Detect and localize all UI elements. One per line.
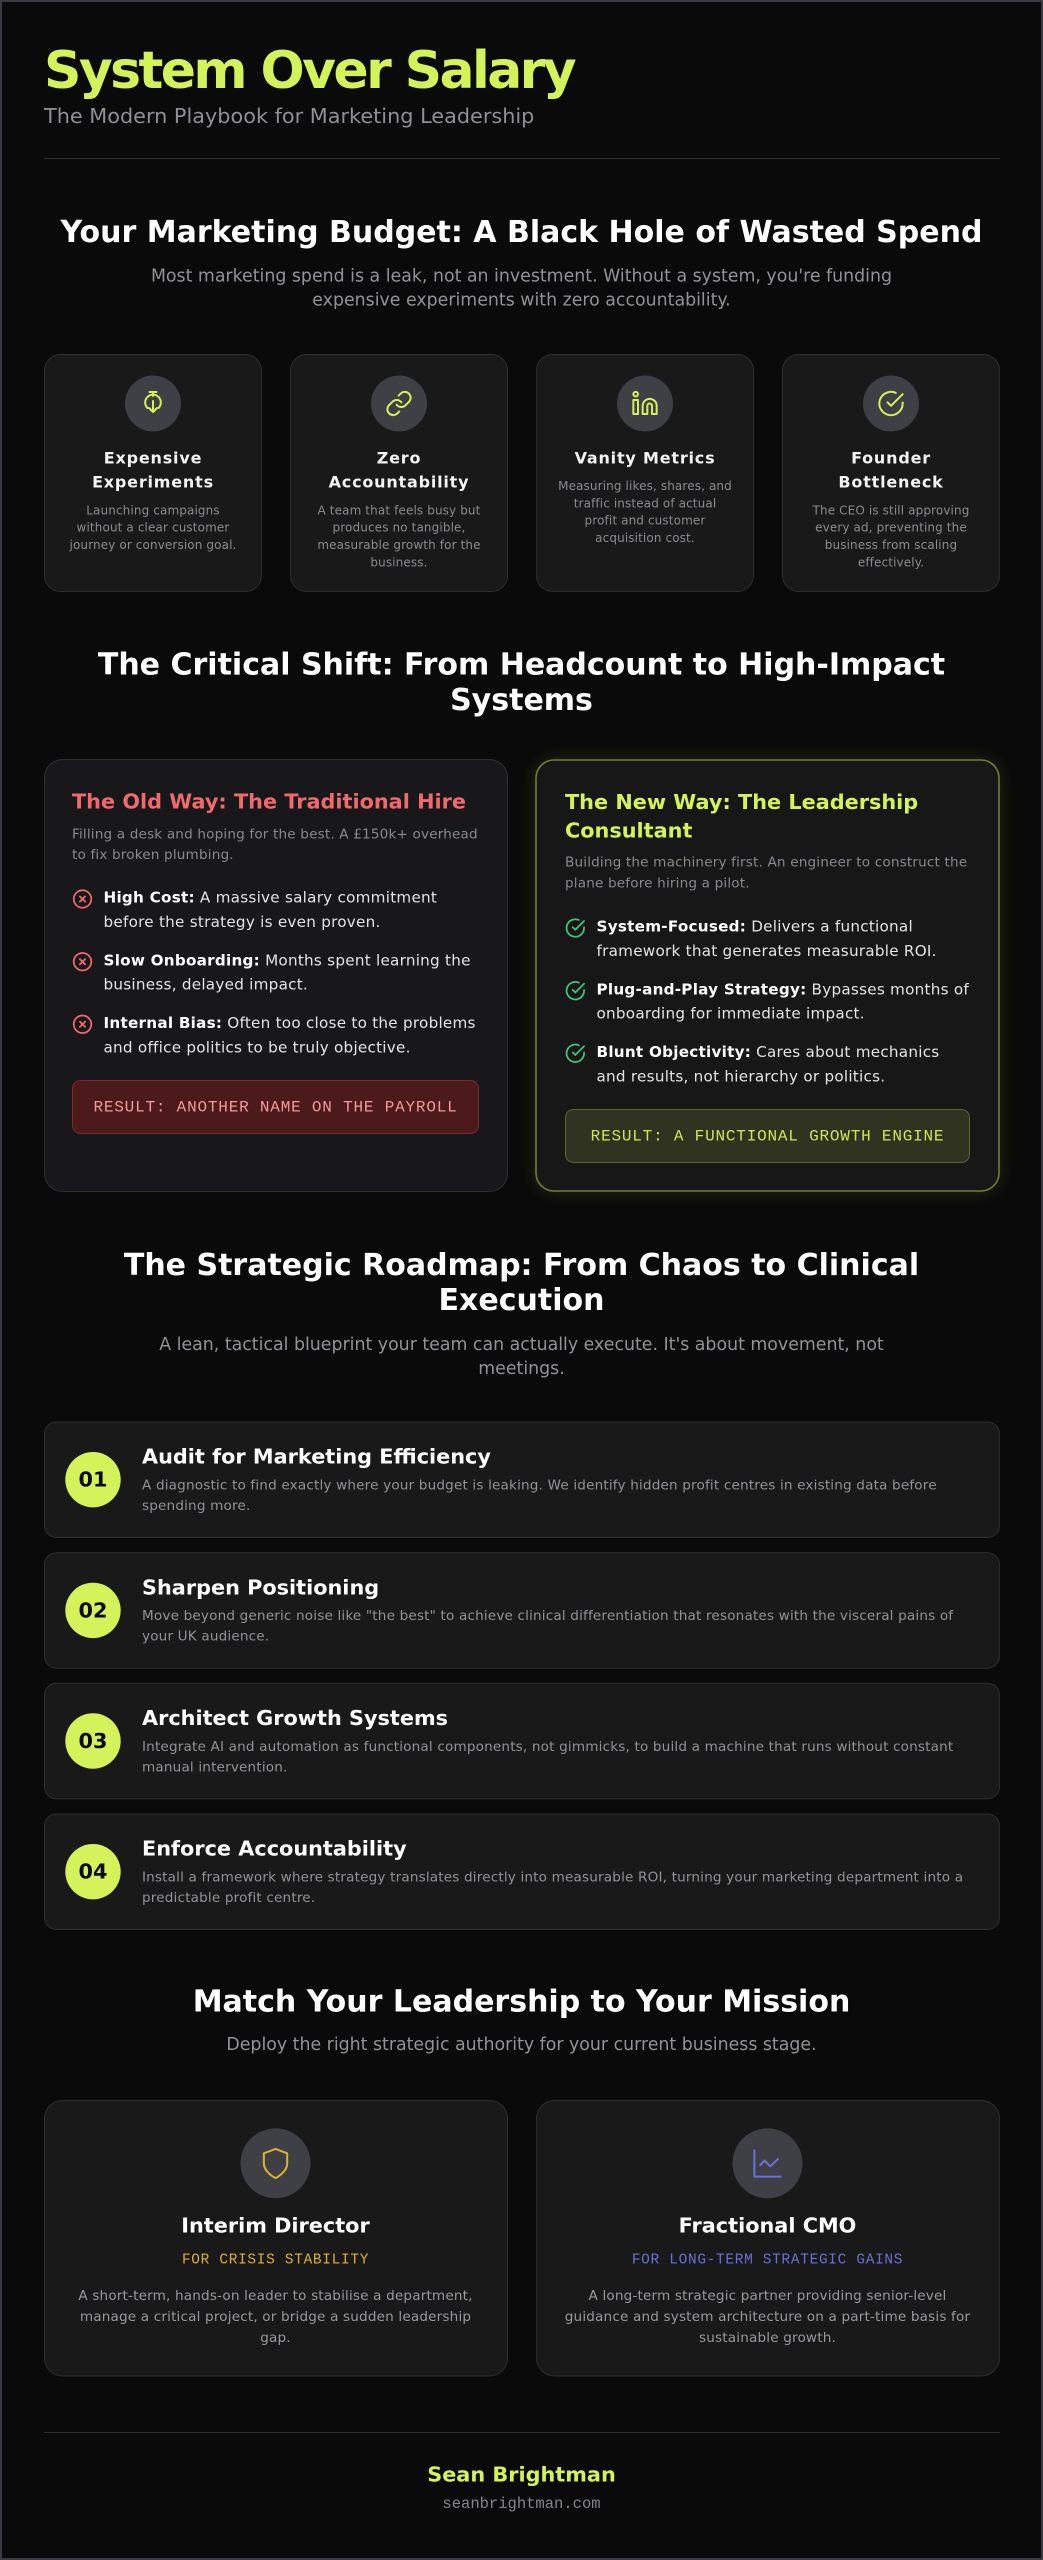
panel: vanity metrics: Vanity Metrics bbox=[575, 448, 715, 468]
panel: step 02 bbox=[44, 1553, 1000, 1668]
panel: expensive experiments: Experiments bbox=[92, 472, 214, 492]
subtitle: The Modern Playbook for Marketing Leadership bbox=[43, 104, 534, 128]
icon: link bbox=[387, 392, 411, 415]
panel: the old way bbox=[44, 760, 508, 1192]
panel: vanity metrics: acquisition cost. bbox=[595, 531, 695, 545]
section heading: wasted spend: Most marketing spend is a leak, not an investment. Without a system, you're funding bbox=[151, 266, 892, 286]
panel: the new way: and results, not hierarchy or politics. bbox=[596, 1067, 885, 1085]
section heading: match leadership: Deploy the right strategic authority for your current business stage. bbox=[226, 2035, 817, 2055]
icon: circle check bbox=[879, 392, 903, 415]
panel: interim director: gap. bbox=[260, 2330, 291, 2346]
panel: interim director bbox=[44, 2100, 508, 2376]
panel: expensive experiments: without a clear customer bbox=[77, 521, 229, 535]
section heading: critical shift: Systems bbox=[450, 683, 593, 718]
header: title and subtitle bbox=[43, 41, 576, 128]
panel: interim director: Interim Director bbox=[181, 2214, 370, 2238]
section heading: roadmap: meetings. bbox=[478, 1359, 565, 1379]
panel: interim director: manage a critical project, or bridge a sudden leadership bbox=[80, 2309, 471, 2325]
panel: founder bottleneck: Founder bbox=[851, 448, 931, 468]
panel: expensive experiments: Expensive bbox=[104, 448, 202, 468]
panel: vanity metrics bbox=[536, 354, 754, 592]
panel: vanity metrics: Measuring likes, shares, and bbox=[558, 479, 732, 493]
panel: the old way: Internal Bias: Often too close to the problems bbox=[104, 1014, 476, 1032]
panel: the new way: framework that generates measurable ROI. bbox=[596, 942, 937, 960]
panel: step 04: Enforce Accountability bbox=[142, 1837, 407, 1861]
icon: funnel arrow bbox=[145, 392, 161, 412]
panel: step 04 bbox=[44, 1814, 1000, 1930]
section heading: roadmap bbox=[124, 1248, 919, 1379]
panel: step 03: Integrate AI and automation as functional components, not gimmicks, to build a machine that runs without constant bbox=[142, 1739, 953, 1755]
panel: the new way: onboarding for immediate impact. bbox=[596, 1005, 865, 1023]
panel: the new way: System-Focused: Delivers a functional bbox=[596, 918, 913, 936]
panel: fractional cmo: FOR LONG-TERM STRATEGIC GAINS bbox=[632, 2253, 903, 2269]
panel: zero accountability: Zero bbox=[377, 448, 421, 468]
panel: the old way: Slow Onboarding: Months spent learning the bbox=[104, 951, 471, 969]
panel: the old way: Filling a desk and hoping for the best. A £150k+ overhead bbox=[72, 826, 478, 842]
section heading: critical shift bbox=[98, 648, 945, 718]
icon: line chart bbox=[754, 2150, 781, 2177]
footer: Sean Brightman bbox=[427, 2462, 616, 2486]
panel: founder bottleneck: The CEO is still approving bbox=[812, 504, 969, 518]
panel: step 02: Sharpen Positioning bbox=[142, 1575, 379, 1599]
callout: old way result: RESULT: ANOTHER NAME ON THE PAYROLL bbox=[93, 1099, 458, 1117]
panel: zero accountability: Accountability bbox=[329, 472, 469, 492]
panel: step 03: 03 bbox=[79, 1729, 107, 1753]
footer: seanbrightman.com bbox=[442, 2495, 601, 2513]
panel: expensive experiments: Launching campaigns bbox=[86, 504, 220, 518]
icon: check circle bbox=[567, 919, 584, 937]
callout: old way result bbox=[72, 1080, 478, 1134]
panel: step 01: Audit for Marketing Efficiency bbox=[142, 1445, 491, 1469]
section heading: roadmap: The Strategic Roadmap: From Chaos to Clinical bbox=[124, 1248, 919, 1283]
panel: the old way: business, delayed impact. bbox=[104, 976, 308, 994]
panel: step 04: 04 bbox=[79, 1860, 107, 1884]
panel: interim director: FOR CRISIS STABILITY bbox=[182, 2253, 369, 2269]
panel: zero accountability: measurable growth for the bbox=[317, 538, 481, 552]
panel: the new way bbox=[536, 760, 999, 1191]
panel: step 02: 02 bbox=[79, 1598, 107, 1622]
panel: step 03: manual intervention. bbox=[142, 1759, 288, 1775]
panel: step 01: spending more. bbox=[142, 1498, 250, 1514]
panel: step 04: predictable profit centre. bbox=[142, 1890, 315, 1906]
section heading: wasted spend bbox=[60, 215, 982, 310]
section heading: critical shift: The Critical Shift: From Headcount to High-Impact bbox=[98, 648, 945, 682]
panel: the old way: to fix broken plumbing. bbox=[72, 847, 234, 863]
callout: new way result bbox=[566, 1110, 970, 1162]
panel: fractional cmo: guidance and system architecture on a part-time basis for bbox=[565, 2309, 970, 2325]
icon: check circle bbox=[567, 982, 584, 999]
callout: new way result: RESULT: A FUNCTIONAL GROWTH ENGINE bbox=[591, 1128, 944, 1146]
panel: fractional cmo bbox=[536, 2100, 1000, 2376]
panel: zero accountability: produces no tangible, bbox=[333, 521, 465, 535]
panel: the new way: Consultant bbox=[565, 818, 692, 842]
section heading: match leadership: Match Your Leadership to Your Mission bbox=[193, 1984, 850, 2020]
icon: linkedin bbox=[633, 392, 657, 414]
panel: the old way: before the strategy is even proven. bbox=[104, 913, 381, 931]
panel: the new way: Building the machinery first. An engineer to construct the bbox=[565, 855, 967, 871]
panel: step 02: Move beyond generic noise like "the best" to achieve clinical differentiation that resonates with the visceral pains of bbox=[142, 1608, 954, 1624]
panel: step 03: Architect Growth Systems bbox=[142, 1706, 448, 1730]
panel: fractional cmo: A long-term strategic partner providing senior-level bbox=[589, 2288, 946, 2304]
section heading: wasted spend: Your Marketing Budget: A Black Hole of Wasted Spend bbox=[60, 215, 982, 250]
panel: the old way: High Cost: A massive salary commitment bbox=[104, 889, 437, 907]
panel: zero accountability bbox=[290, 354, 508, 592]
panel: the new way: plane before hiring a pilot. bbox=[565, 876, 750, 892]
panel: the old way: and office politics to be truly objective. bbox=[104, 1038, 411, 1056]
panel: founder bottleneck: effectively. bbox=[858, 556, 924, 570]
panel: founder bottleneck: Bottleneck bbox=[838, 472, 944, 492]
panel: expensive experiments bbox=[44, 354, 262, 592]
footer bbox=[427, 2462, 616, 2513]
panel: the new way: Plug-and-Play Strategy: Bypasses months of bbox=[596, 980, 969, 998]
panel: fractional cmo: Fractional CMO bbox=[679, 2214, 856, 2238]
panel: founder bottleneck: every ad, preventing the bbox=[815, 521, 967, 535]
panel: interim director: A short-term, hands-on leader to stabilise a department, bbox=[78, 2288, 473, 2304]
icon: check circle bbox=[567, 1045, 584, 1062]
panel: founder bottleneck bbox=[782, 354, 1000, 592]
panel: step 01: A diagnostic to find exactly where your budget is leaking. We identify hidden profit centres in existing data before bbox=[142, 1478, 937, 1494]
panel: the old way: The Old Way: The Traditional Hire bbox=[72, 790, 466, 814]
panel: founder bottleneck: business from scaling bbox=[825, 538, 957, 552]
section heading: wasted spend: expensive experiments with zero accountability. bbox=[312, 290, 731, 310]
section heading: roadmap: Execution bbox=[439, 1283, 604, 1318]
panel: step 02: your UK audience. bbox=[142, 1629, 269, 1645]
panel: expensive experiments: journey or conversion goal. bbox=[68, 538, 237, 552]
panel: vanity metrics: traffic instead of actual bbox=[574, 496, 716, 510]
panel: step 04: Install a framework where strategy translates directly into measurable ROI, turning your marketing department into a bbox=[142, 1870, 963, 1886]
icon: shield bbox=[264, 2149, 287, 2178]
panel: step 01: 01 bbox=[79, 1468, 107, 1492]
panel: zero accountability: A team that feels busy but bbox=[318, 504, 481, 518]
title: System Over Salary bbox=[44, 41, 576, 101]
section heading: roadmap: A lean, tactical blueprint your team can actually execute. It's about movement, not bbox=[159, 1335, 884, 1355]
panel: step 01 bbox=[44, 1422, 1000, 1538]
section heading: match leadership bbox=[193, 1984, 850, 2055]
icon: x circle bbox=[74, 1016, 91, 1033]
panel: the new way: Blunt Objectivity: Cares about mechanics bbox=[596, 1043, 939, 1061]
panel: zero accountability: business. bbox=[370, 556, 428, 570]
panel: vanity metrics: profit and customer bbox=[585, 514, 705, 528]
icon: x circle bbox=[74, 953, 91, 970]
panel: step 03 bbox=[44, 1683, 1000, 1799]
panel: fractional cmo: sustainable growth. bbox=[699, 2330, 836, 2346]
icon: x circle bbox=[74, 890, 91, 908]
panel: the new way: The New Way: The Leadership bbox=[565, 790, 918, 814]
